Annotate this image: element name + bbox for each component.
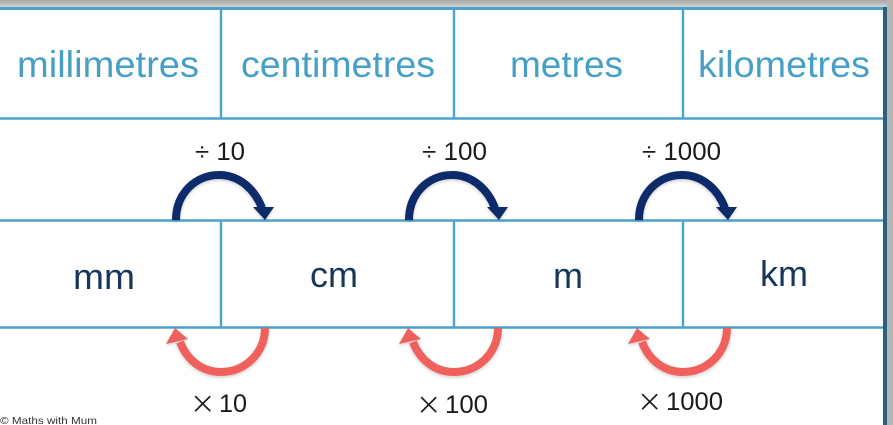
arrow: cm to m [409, 175, 508, 220]
unit names row: millimetres [17, 44, 199, 85]
multiply labels: 10 [219, 390, 247, 418]
multiply labels: 100 [445, 391, 488, 419]
unit names row: metres [510, 44, 623, 85]
multiply signs [191, 380, 661, 425]
multiply labels [219, 388, 723, 419]
divide labels: ÷ 1000 [642, 138, 721, 166]
unit names row: kilometres [698, 44, 870, 85]
unit abbreviations row: m [553, 255, 583, 296]
unit names row [17, 44, 870, 85]
arrow: mm to cm [176, 175, 274, 220]
multiply labels: 1000 [666, 388, 723, 416]
divide labels: ÷ 100 [422, 138, 487, 166]
unit abbreviations row: cm [310, 254, 358, 295]
divide labels [195, 138, 721, 166]
unit abbreviations row: mm [73, 256, 135, 297]
unit names row: centimetres [241, 44, 435, 85]
divide labels: ÷ 10 [195, 138, 245, 166]
unit abbreviations row: km [760, 253, 808, 294]
arrow: cm to mm [166, 328, 265, 372]
unit abbreviations row [73, 253, 808, 297]
conversion table grid [0, 8, 883, 328]
arrow: km to m [628, 328, 727, 372]
multiply signs: × [638, 380, 661, 424]
arrow: m to km [639, 175, 737, 220]
multiply signs: × [191, 382, 214, 425]
arrow: m to cm [399, 328, 498, 372]
